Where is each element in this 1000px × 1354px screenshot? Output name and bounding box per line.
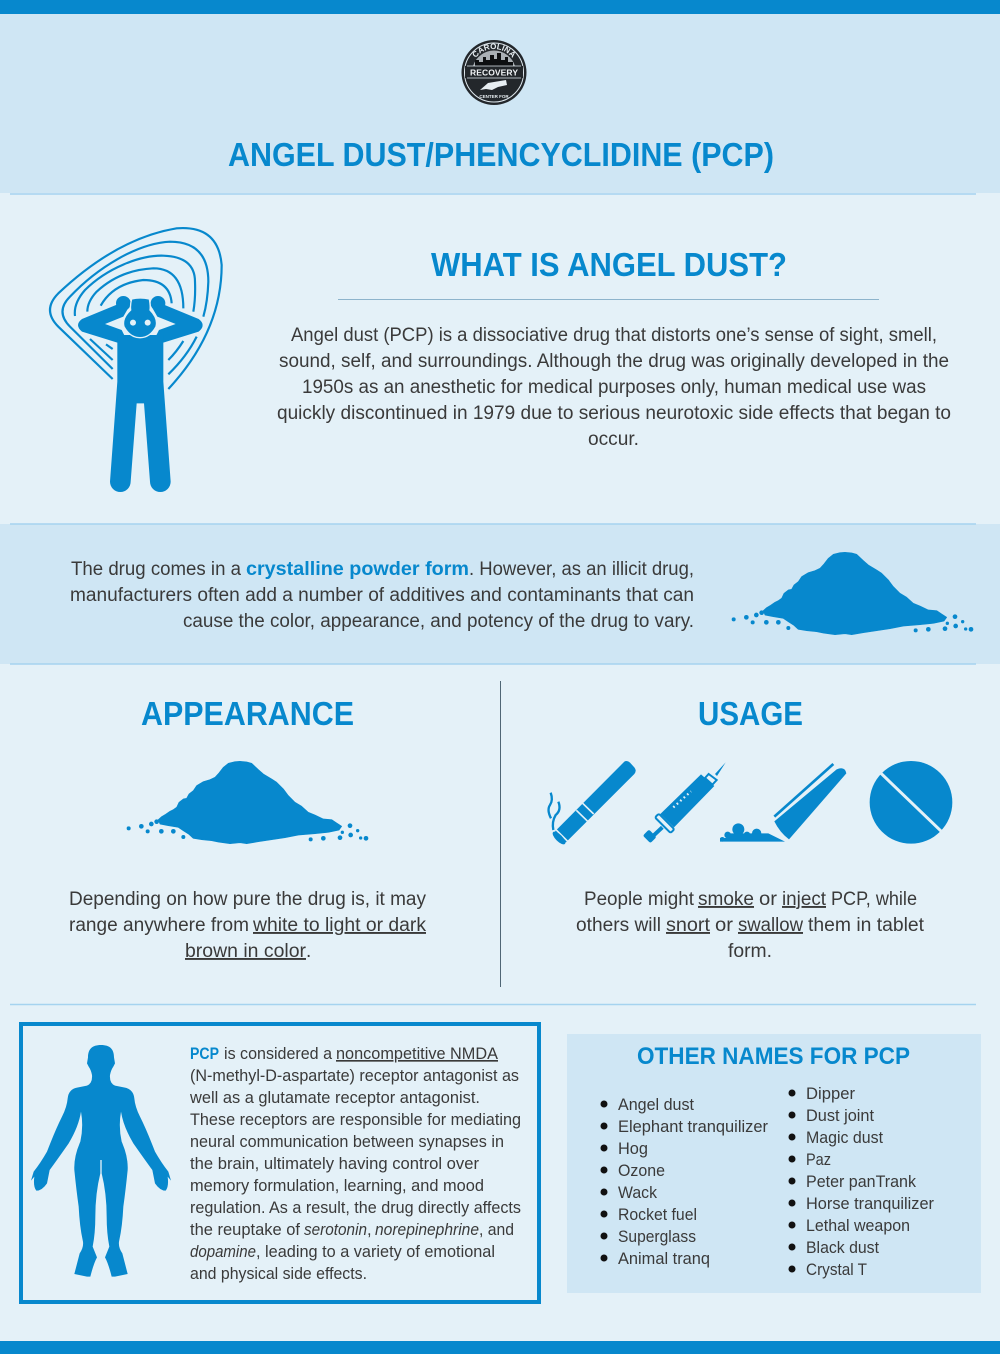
top bar: [0, 0, 1000, 14]
text block: usage description: or: [759, 889, 778, 910]
text block: NMDA explanation: norepinephrine: [375, 1221, 479, 1239]
list: names column one: Ozone: [618, 1162, 665, 1180]
heading: other names: OTHER NAMES FOR PCP: [637, 1043, 910, 1070]
list: names column two: Horse tranquilizer: [806, 1195, 934, 1213]
text block: definition: sound, self, and surroundings. Although the drug was originally developed in the: [279, 351, 949, 372]
text block: NMDA explanation: the reuptake of: [190, 1221, 300, 1239]
panel: PCP mechanism box: [21, 1024, 539, 1302]
text block: powder form description: cause the color, appearance, and potency of the drug to vary.: [183, 611, 694, 632]
icon: human body silhouette: [31, 1045, 171, 1277]
logo: Carolina Recovery Center: CAROLINA: [472, 44, 515, 58]
list: names column one: Hog: [618, 1140, 648, 1158]
text block: NMDA explanation: memory formulation, learning, and mood: [190, 1177, 484, 1195]
text block: NMDA explanation: neural communication between synapses in: [190, 1133, 504, 1151]
text block: NMDA explanation: noncompetitive NMDA: [336, 1045, 498, 1063]
text block: definition: Angel dust (PCP) is a dissociative drug that distorts one’s sense of sight, smell,: [291, 325, 937, 346]
text block: NMDA explanation: , leading to a variety of emotional: [256, 1243, 495, 1261]
list: names column two: Magic dust: [806, 1129, 883, 1147]
text block: NMDA explanation: regulation. As a result, the drug directly affects: [190, 1199, 521, 1217]
text block: appearance description: white to light or dark: [252, 915, 427, 936]
list: names column two: Dipper: [806, 1085, 856, 1103]
text block: powder form description: . However, as an illicit drug,: [469, 559, 694, 580]
text block: appearance description: Depending on how pure the drug is, it may: [69, 889, 426, 910]
icon: tablet: [870, 761, 952, 844]
list: names column two: Dust joint: [806, 1107, 874, 1125]
text block: NMDA explanation: the brain, ultimately having control over: [190, 1155, 479, 1173]
logo: Carolina Recovery Center: CENTER FOR: [479, 94, 509, 99]
list: names column one: Elephant tranquilizer: [618, 1118, 768, 1136]
text block: NMDA explanation: (N-methyl-D-aspartate) receptor antagonist as: [190, 1067, 519, 1085]
list: names column one: Rocket fuel: [618, 1206, 697, 1224]
icon: syringe: [643, 762, 726, 843]
text block: NMDA explanation: These receptors are responsible for mediating: [190, 1111, 521, 1129]
list: names column one: [600, 1096, 768, 1268]
title: ANGEL DUST/PHENCYCLIDINE (PCP): [228, 136, 774, 173]
text block: appearance description: .: [306, 941, 311, 962]
text block: powder form description: crystalline powder form: [246, 559, 469, 580]
text block: usage description: them in tablet: [808, 915, 925, 936]
icon: person with dizzy head rings: [50, 228, 222, 492]
icon: snorting tube and powder: [720, 764, 846, 842]
list: names column two: Black dust: [806, 1239, 879, 1257]
text block: NMDA explanation: PCP: [190, 1045, 219, 1063]
text block: NMDA explanation: and physical side effects.: [190, 1265, 367, 1283]
text block: NMDA explanation: , and: [479, 1221, 514, 1239]
text block: usage description: form.: [728, 941, 772, 962]
logo: Carolina Recovery Center: RECOVERY: [470, 68, 518, 78]
text block: NMDA explanation: ,: [367, 1221, 372, 1239]
heading: usage: USAGE: [698, 695, 803, 732]
list: names column two: Paz: [806, 1151, 831, 1169]
text block: usage description: or: [715, 915, 734, 936]
text block: usage description: smoke: [698, 889, 754, 910]
text block: usage description: PCP, while: [831, 889, 917, 910]
list: names column two: [788, 1085, 934, 1279]
text block: appearance description: [69, 889, 427, 962]
heading: appearance: APPEARANCE: [141, 695, 354, 732]
text block: usage description: swallow: [738, 915, 803, 936]
text block: appearance description: range anywhere from: [69, 915, 249, 936]
text block: NMDA explanation: well as a glutamate receptor antagonist.: [189, 1089, 480, 1107]
text block: usage description: others will: [576, 915, 661, 936]
text block: powder form description: [70, 559, 694, 632]
text block: definition: occur.: [588, 429, 639, 450]
text block: NMDA explanation: dopamine: [190, 1243, 256, 1261]
text block: usage description: [576, 889, 925, 962]
list: names column one: Superglass: [618, 1228, 696, 1246]
list: names column two: Peter panTrank: [806, 1173, 917, 1191]
icon: powder pile, appearance: [127, 761, 368, 844]
text block: powder form description: The drug comes in a: [71, 559, 241, 580]
list: names column one: Animal tranq: [618, 1250, 710, 1268]
panel: other names for PCP: [567, 1034, 981, 1293]
bottom bar: [0, 1341, 1000, 1354]
text block: appearance description: brown in color: [185, 941, 307, 962]
heading: what is angel dust: WHAT IS ANGEL DUST?: [431, 246, 787, 283]
text block: definition: 1950s as an anesthetic for medical purposes only, human medical use was: [302, 377, 926, 398]
text block: NMDA explanation: serotonin: [304, 1221, 367, 1239]
icons: usage methods: [549, 761, 952, 846]
panel: crystalline powder band: [0, 524, 1000, 664]
header band: [0, 14, 1000, 193]
text block: usage description: snort: [666, 915, 711, 936]
list: names column one: Angel dust: [618, 1096, 694, 1114]
text block: powder form description: manufacturers often add a number of additives and contaminants that can: [70, 585, 694, 606]
text block: NMDA explanation: is considered a: [224, 1045, 333, 1063]
text block: definition: [277, 325, 951, 450]
list: names column two: Crystal T: [806, 1261, 867, 1279]
text block: usage description: inject: [782, 889, 827, 910]
list: names column one: Wack: [618, 1184, 658, 1202]
text block: definition: quickly discontinued in 1979 due to serious neurotoxic side effects that began to: [277, 403, 951, 424]
logo: Carolina Recovery Center: [462, 40, 526, 105]
icon: cigarette: [549, 761, 636, 846]
icon: powder pile: [732, 552, 973, 635]
text block: NMDA explanation: [189, 1045, 521, 1283]
text block: usage description: People might: [584, 889, 695, 910]
list: names column two: Lethal weapon: [806, 1217, 910, 1235]
